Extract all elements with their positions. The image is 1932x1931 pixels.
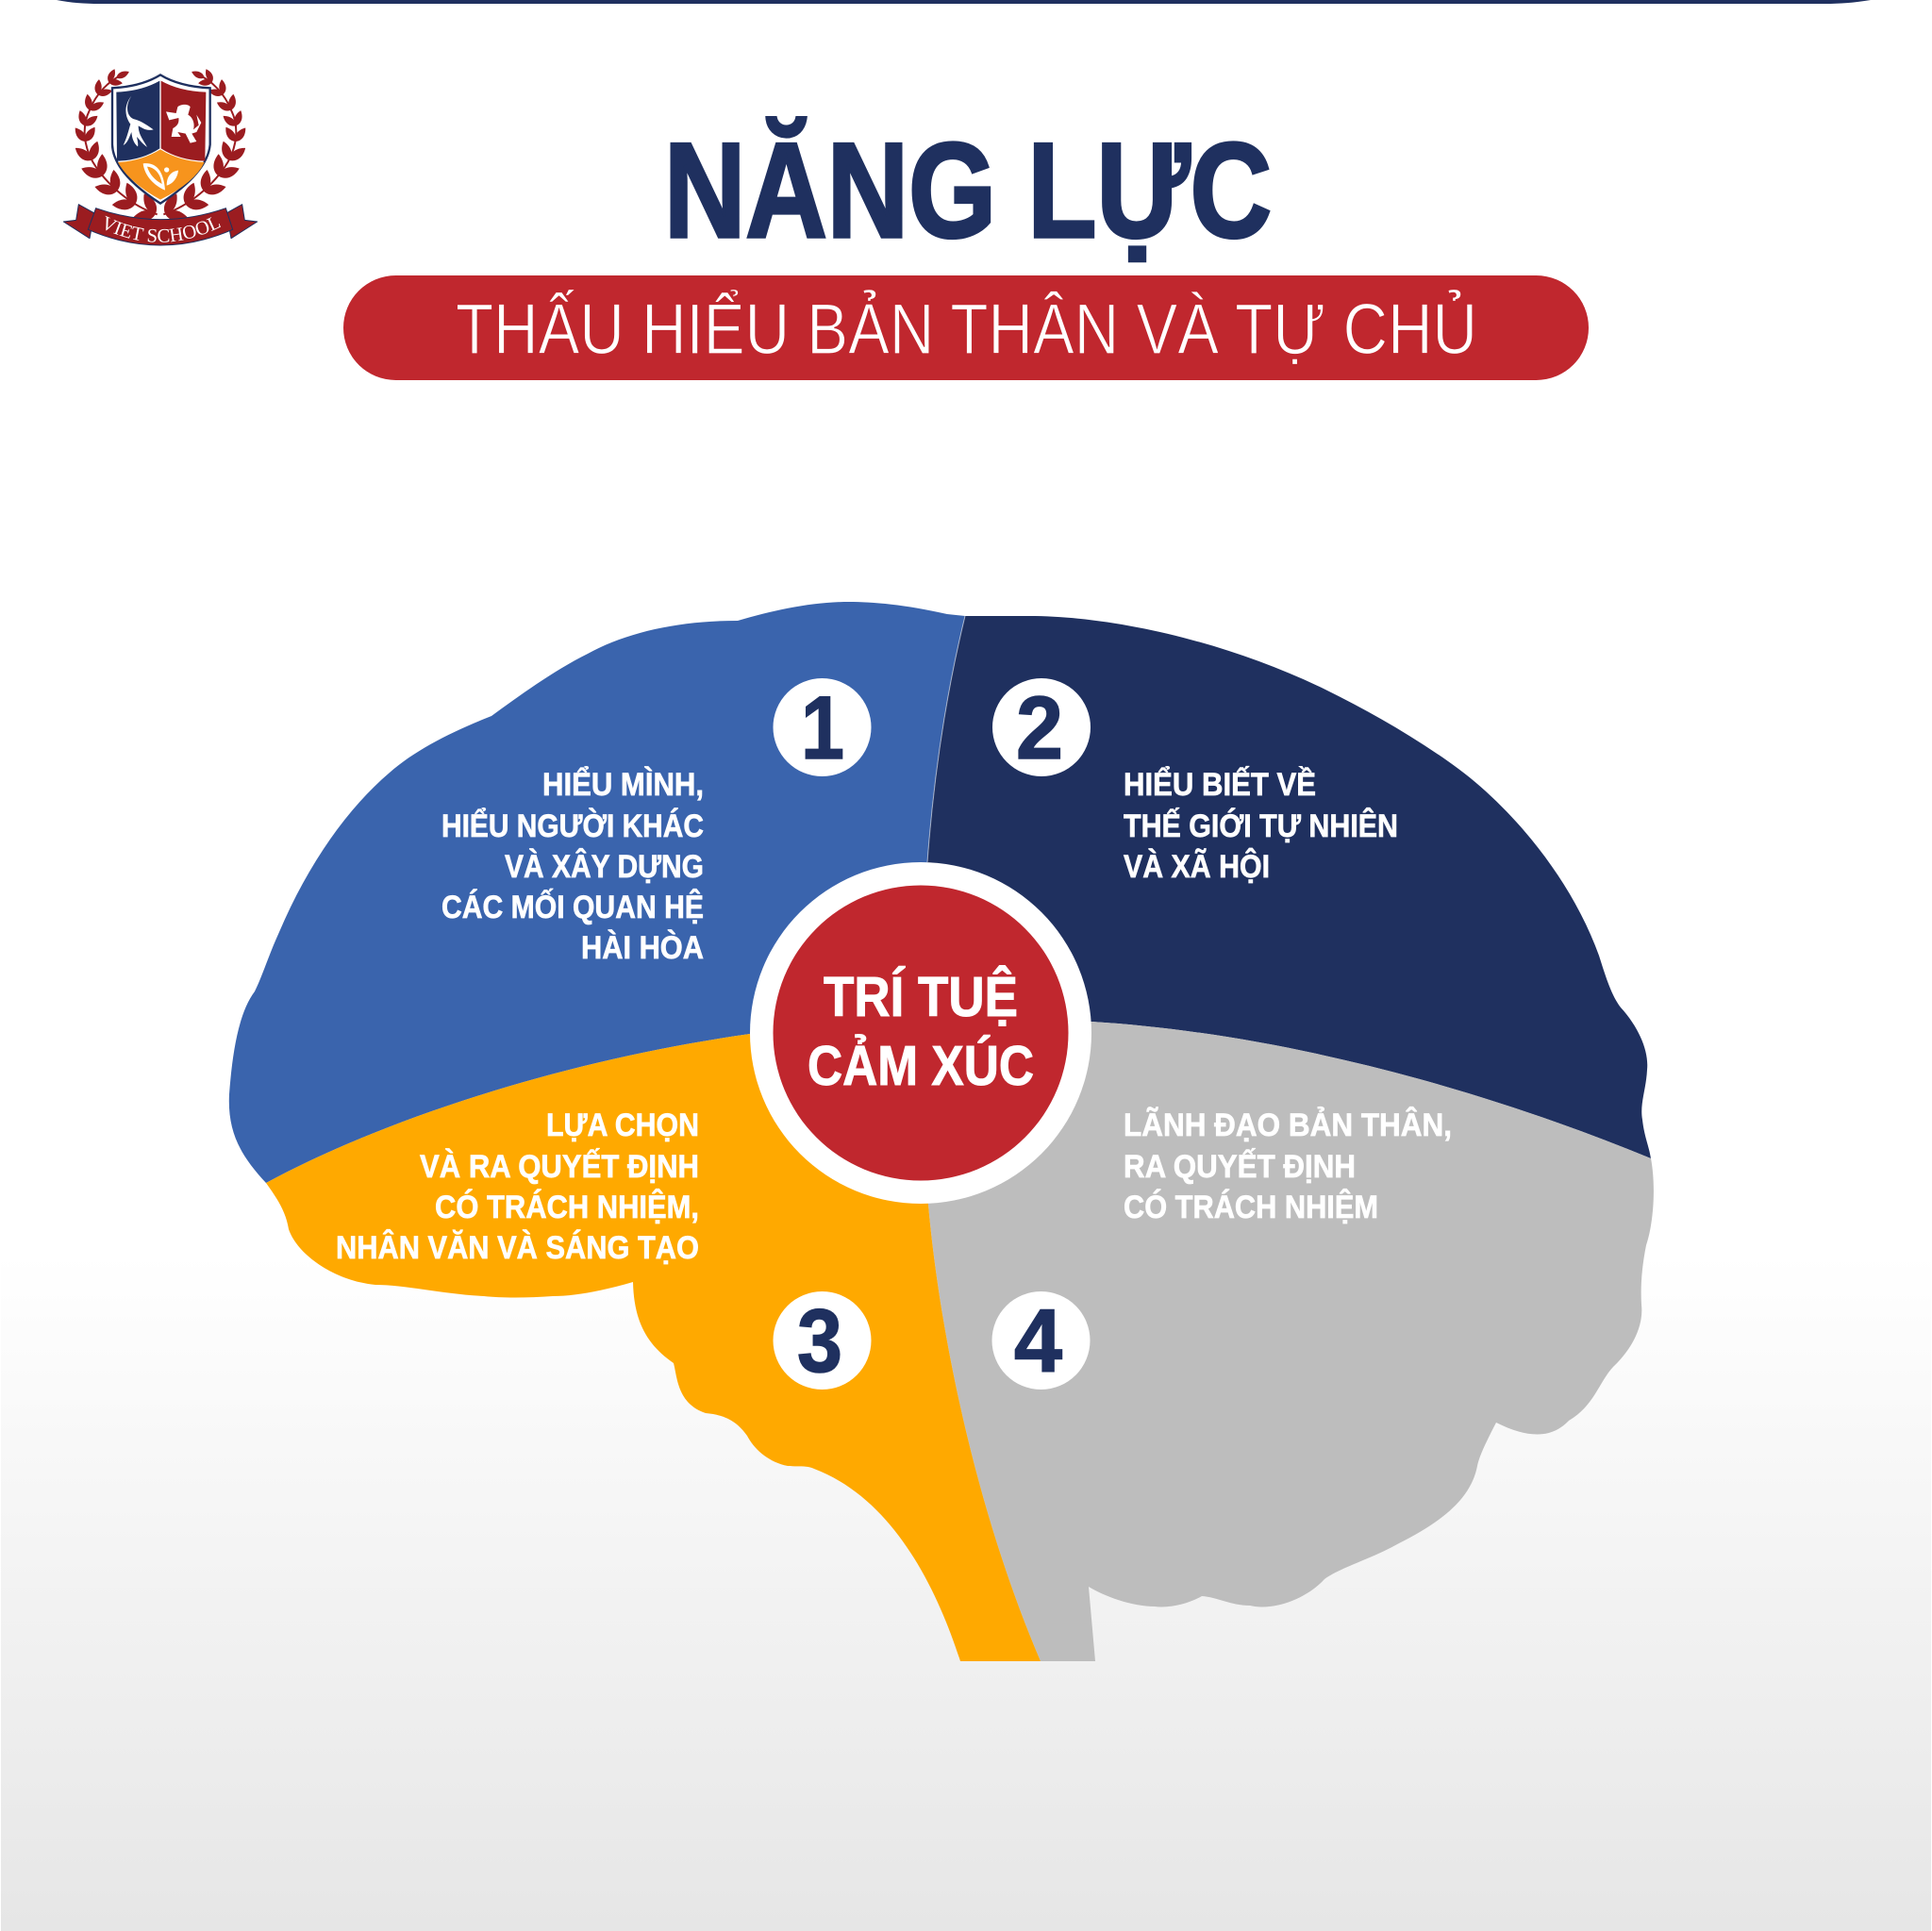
text: section 2: HIỂU BIẾT VỀ	[1124, 765, 1316, 803]
top border bar	[57, 0, 1871, 4]
text: section 2: THẾ GIỚI TỰ NHIÊN	[1124, 807, 1398, 844]
badge 4: 4	[1014, 1291, 1062, 1391]
subtitle text: THẤU HIỂU BẢN THÂN VÀ TỰ CHỦ	[456, 289, 1477, 370]
text: section 3: VÀ RA QUYẾT ĐỊNH	[420, 1147, 699, 1185]
ribbon text: VIET SCHOOL	[106, 215, 221, 242]
panel 4: gray lobe	[921, 1022, 1654, 1661]
text: section 3: NHÂN VĂN VÀ SÁNG TẠO	[336, 1228, 699, 1266]
panel 1: blue lobe	[229, 602, 965, 1183]
text: section 4: LÃNH ĐẠO BẢN THÂN,	[1124, 1106, 1452, 1143]
badge 3: 3	[797, 1291, 842, 1391]
text: section 3	[336, 1107, 699, 1266]
icon: phoenix	[124, 96, 154, 147]
text: section 1: CÁC MỐI QUAN HỆ	[441, 888, 704, 925]
subtitle banner	[343, 275, 1589, 380]
icon: lion	[166, 105, 201, 143]
text: section 1	[441, 765, 704, 966]
icon: ribbon tails	[63, 205, 258, 239]
badge 2	[992, 678, 1091, 778]
badge 2: 2	[1016, 678, 1063, 778]
text: section 2	[1124, 765, 1398, 885]
icon: shield	[112, 75, 210, 204]
text: section 3: LỰA CHỌN	[546, 1107, 699, 1143]
brain diagram	[229, 602, 1654, 1661]
center circle: emotional intelligence: TRÍ TUỆ	[824, 965, 1018, 1028]
text: section 4: RA QUYẾT ĐỊNH	[1124, 1147, 1356, 1185]
logo: Viet School crest	[62, 69, 258, 245]
text: section 1: HIỂU NGƯỜI KHÁC	[441, 807, 704, 844]
text: section 1: HIỂU MÌNH,	[542, 765, 704, 803]
text: section 4	[1124, 1106, 1452, 1225]
center circle: emotional intelligence: CẢM XÚC	[808, 1034, 1034, 1097]
icon: sprout	[143, 163, 178, 191]
title: NĂNG LỰC	[664, 116, 1272, 266]
badge 1: 1	[801, 678, 844, 778]
badge 4	[992, 1291, 1091, 1391]
icon: left laurel	[73, 68, 160, 223]
icon: right laurel	[160, 68, 248, 223]
text: section 1: HÀI HÒA	[581, 928, 704, 966]
panel 3: orange lobe	[266, 1033, 1041, 1661]
badge 1	[774, 678, 872, 778]
icon: ribbon band	[88, 208, 233, 245]
text: section 4: CÓ TRÁCH NHIỆM	[1124, 1188, 1378, 1225]
text: section 2: VÀ XÃ HỘI	[1124, 847, 1270, 885]
text: section 3: CÓ TRÁCH NHIỆM,	[435, 1188, 699, 1225]
text: section 1: VÀ XÂY DỰNG	[505, 847, 704, 885]
center circle: emotional intelligence	[750, 862, 1091, 1204]
panel 2: navy lobe	[921, 616, 1651, 1158]
badge 3	[774, 1291, 872, 1391]
